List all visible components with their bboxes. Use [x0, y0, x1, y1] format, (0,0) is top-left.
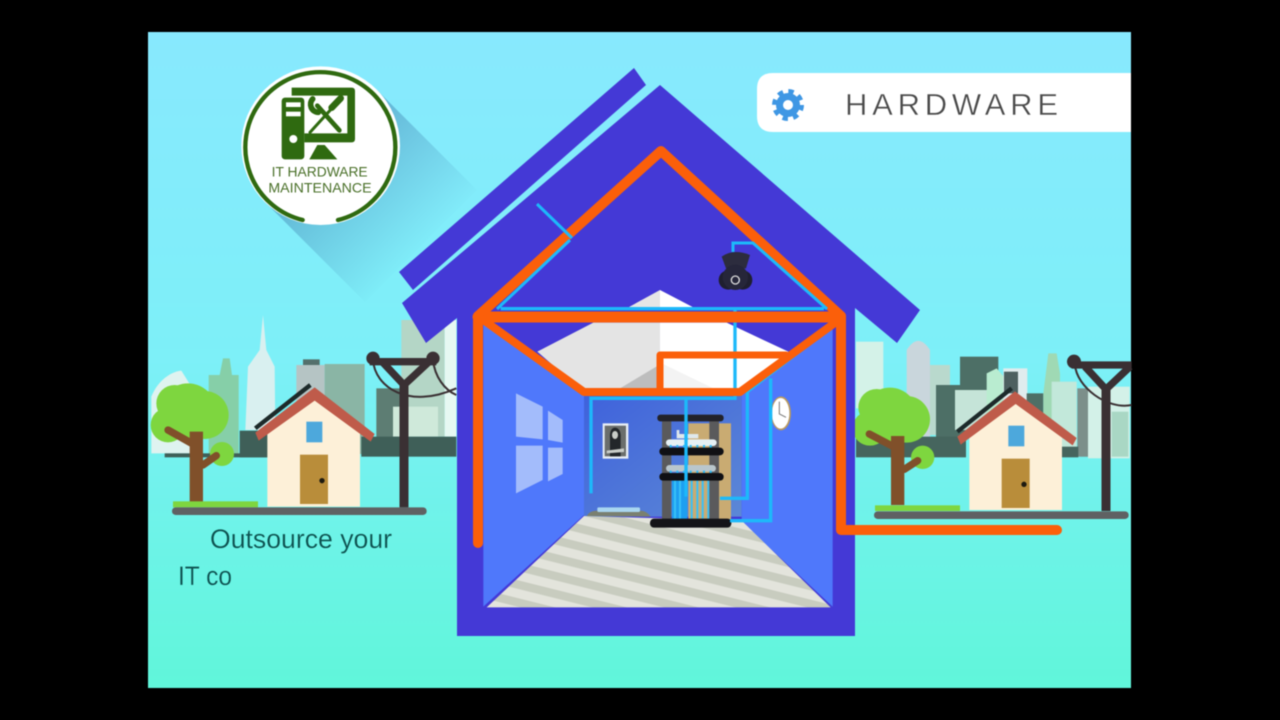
icon: gear [775, 92, 801, 118]
badge text [268, 163, 372, 195]
right grass [875, 505, 960, 511]
ceiling peak [628, 290, 660, 307]
badge circle [241, 66, 400, 225]
badge: IT hardware maintenance [241, 66, 400, 225]
heading text: HARDWARE [845, 87, 1058, 122]
house body and roof [402, 85, 920, 636]
left neighbourhood scene [151, 315, 456, 515]
left wall [483, 322, 584, 607]
left house [255, 385, 375, 507]
left tree [151, 383, 234, 502]
floor [487, 516, 831, 607]
ceiling opening [537, 323, 660, 392]
heading pill [757, 73, 1131, 132]
right road [874, 511, 1129, 519]
room interior [483, 290, 833, 607]
server rack [650, 415, 731, 528]
background panel [148, 32, 1131, 688]
blue network cables [501, 308, 832, 521]
left skyline [151, 315, 456, 457]
caption: outsource your IT co [178, 524, 392, 591]
clock [771, 396, 791, 430]
left grass [173, 501, 258, 507]
icon: computer and tools [282, 88, 355, 159]
caption: outsource your IT co: IT co [178, 561, 232, 591]
badge long shadow [265, 90, 477, 302]
window [516, 393, 563, 493]
left road [172, 507, 427, 515]
right skyline [856, 341, 1130, 458]
back wall [584, 395, 742, 517]
caption: outsource your IT co: Outsource your [210, 524, 392, 554]
badge text: MAINTENANCE [268, 179, 372, 195]
house [399, 68, 1057, 636]
security camera [719, 252, 752, 290]
left utility pole [366, 352, 456, 507]
bed [587, 507, 651, 517]
badge ring [245, 72, 395, 220]
badge text: IT HARDWARE [272, 163, 368, 179]
orange power lines [478, 151, 1057, 543]
heading bar: hardware [757, 73, 1131, 132]
blue cables along roof [497, 204, 827, 309]
solar panel [399, 68, 646, 290]
painting: Mona Lisa [603, 423, 628, 459]
right tree [853, 388, 934, 505]
right wall [742, 327, 833, 607]
right neighbourhood scene [853, 341, 1132, 519]
right house [957, 388, 1077, 510]
right utility pole [1067, 355, 1132, 511]
